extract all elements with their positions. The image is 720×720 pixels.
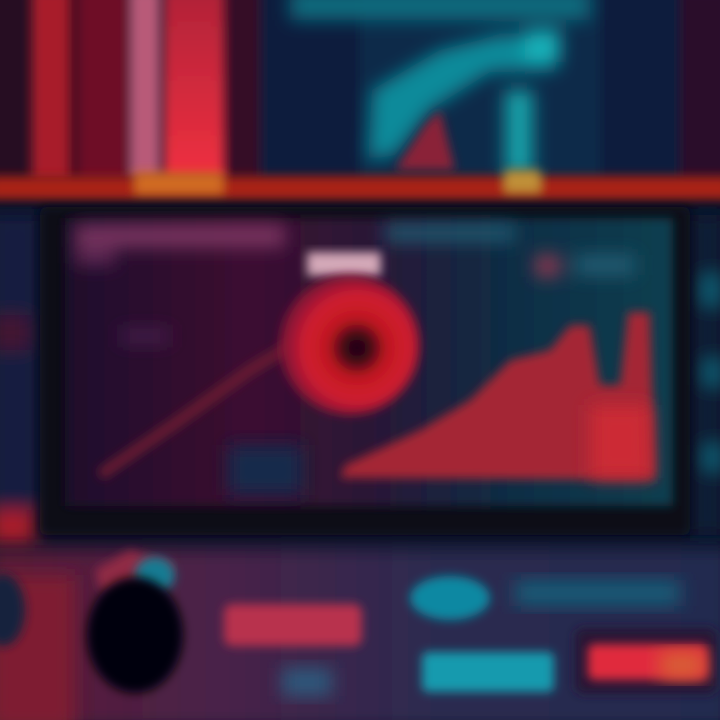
knob — [87, 550, 183, 693]
knob body — [87, 577, 183, 693]
teal oval button — [410, 576, 490, 620]
white label — [307, 252, 381, 276]
heading bars — [75, 225, 635, 342]
red glowing button — [575, 628, 717, 694]
left red area — [0, 575, 75, 720]
top skyline band — [0, 0, 720, 180]
teal strip — [515, 580, 680, 606]
monitor screen — [65, 218, 673, 506]
line chart — [100, 340, 300, 475]
small teal label — [282, 668, 332, 696]
panel: monitor — [40, 207, 690, 535]
monitor frame — [40, 207, 690, 535]
lower screen label — [228, 445, 303, 495]
pink button — [224, 604, 362, 646]
desk — [0, 548, 720, 720]
left wall below strip — [0, 215, 720, 545]
red peak — [395, 110, 455, 170]
red horizontal strip — [0, 170, 720, 200]
knob cap — [95, 550, 175, 600]
teal bar button — [422, 652, 554, 692]
red donut — [280, 275, 420, 415]
teal cloud shapes — [290, 0, 590, 175]
left dial — [0, 574, 25, 646]
area chart — [340, 312, 655, 480]
